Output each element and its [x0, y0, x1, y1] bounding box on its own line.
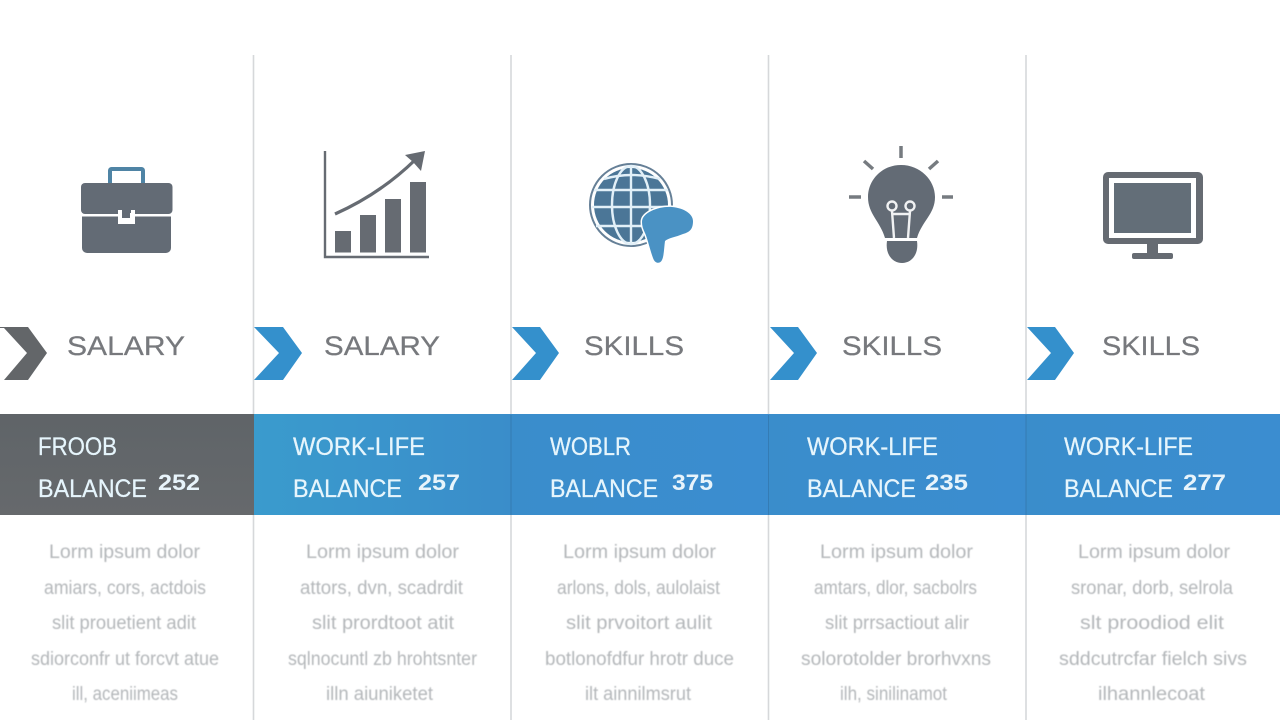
band: work-life balance [769, 414, 1026, 515]
arrow: grey chevron [0, 327, 47, 380]
text block: column 2 description: attors, dvn, scadrdit [300, 578, 464, 599]
text block: column 3 description [545, 542, 734, 705]
heading: skills: SKILLS [842, 331, 942, 361]
text block: column 5 description [1059, 542, 1247, 705]
heading: skills: SKILLS [584, 331, 684, 361]
panel: column 2 salary [254, 151, 511, 705]
text block: column 4 description: Lorm ipsum dolor [820, 542, 974, 563]
band: work-life balance: WORK-LIFE [1064, 433, 1193, 461]
band: grey label [0, 414, 254, 515]
heading: salary: SALARY [67, 331, 185, 361]
band: work-life balance: WORK-LIFE [807, 433, 938, 461]
text block: column 5 description: Lorm ipsum dolor [1078, 542, 1231, 563]
panel: column 5 skills [1026, 172, 1280, 705]
text block: column 1 description: ill, aceniimeas [72, 684, 178, 705]
band: work balance: WOBLR [550, 433, 631, 461]
text block: column 2 description: sqlnocuntl zb hrohtsnter [288, 649, 478, 670]
band: grey label: 252 [158, 470, 200, 495]
text block: column 3 description: arlons, dols, aulolaist [557, 578, 721, 599]
text block: column 1 description [31, 542, 219, 705]
panel: column 3 skills [511, 164, 769, 705]
text block: column 1 description: slit prouetient adit [52, 613, 197, 634]
text block: column 2 description [288, 542, 478, 705]
icon: desktop monitor [1103, 172, 1203, 259]
text block: column 4 description: slit prrsactiout alir [825, 613, 970, 634]
arrow: blue chevron [770, 327, 817, 380]
text block: column 1 description: Lorm ipsum dolor [49, 542, 201, 563]
text block: column 2 description: illn aiuniketet [326, 684, 434, 705]
band: work-life balance [1026, 414, 1280, 515]
band: work-life balance: 277 [1183, 470, 1226, 495]
arrow: blue chevron [1027, 327, 1074, 380]
text block: column 4 description [801, 542, 991, 705]
panel: column 1 salary [0, 169, 254, 705]
text block: column 5 description: ilhannlecoat [1098, 684, 1206, 705]
band: work balance: BALANCE [550, 475, 658, 503]
text block: column 1 description: amiars, cors, actdois [44, 578, 206, 599]
text block: column 5 description: sronar, dorb, selrola [1071, 578, 1233, 599]
icon: rising bar chart [325, 151, 429, 257]
text block: column 1 description: sdiorconfr ut forcvt atue [31, 649, 219, 670]
icon: light bulb [849, 146, 953, 263]
band: work balance [511, 414, 769, 515]
band: grey label: BALANCE [38, 475, 147, 503]
band: work-life balance [254, 414, 511, 515]
band: work-life balance: WORK-LIFE [293, 433, 425, 461]
band: work-life balance: 257 [418, 470, 460, 495]
text block: column 4 description: solorotolder brorhvxns [801, 649, 991, 670]
text block: column 4 description: amtars, dlor, sacbolrs [814, 578, 977, 599]
band: work balance: 375 [672, 470, 713, 495]
arrow: blue chevron [512, 327, 559, 380]
panel: column 4 skills [769, 146, 1026, 705]
band: grey label: FROOB [38, 433, 117, 461]
heading: salary: SALARY [324, 331, 440, 361]
text block: column 5 description: sddcutrcfar fielch sivs [1059, 649, 1247, 670]
text block: column 2 description: Lorm ipsum dolor [306, 542, 460, 563]
icon: globe with map pin shape [590, 164, 693, 263]
text block: column 3 description: ilt ainnilmsrut [585, 684, 692, 705]
band: work-life balance: 235 [925, 470, 968, 495]
heading: skills: SKILLS [1102, 331, 1200, 361]
icon: briefcase [81, 169, 172, 253]
text block: column 3 description: botlonofdfur hrotr duce [545, 649, 734, 670]
arrow: blue chevron [254, 327, 302, 380]
band: work-life balance: BALANCE [1064, 475, 1173, 503]
text block: column 3 description: Lorm ipsum dolor [563, 542, 717, 563]
band: work-life balance: BALANCE [293, 475, 402, 503]
text block: column 4 description: ilh, sinilinamot [840, 684, 948, 705]
band: work-life balance: BALANCE [807, 475, 916, 503]
text block: column 2 description: slit prordtoot atit [312, 613, 455, 634]
text block: column 5 description: slt proodiod elit [1080, 613, 1225, 634]
text block: column 3 description: slit prvoitort aulit [566, 613, 713, 634]
